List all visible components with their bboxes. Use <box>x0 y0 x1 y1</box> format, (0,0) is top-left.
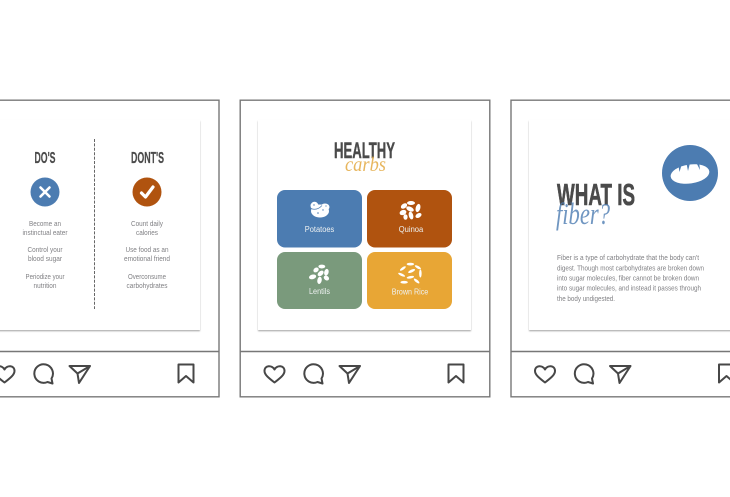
content card <box>0 120 200 330</box>
don'ts list <box>124 221 170 290</box>
post frame <box>0 100 219 397</box>
tile: quinoa: Quinoa <box>399 224 423 234</box>
icon: blue cross <box>30 178 60 206</box>
panel: do's and don'ts post <box>0 100 219 397</box>
heading: don'ts: DONT'S <box>131 150 164 167</box>
content card <box>529 120 730 330</box>
don'ts list: carbohydrates <box>126 283 168 290</box>
do's list: Control your <box>28 247 63 254</box>
action icons <box>264 364 464 384</box>
don'ts list: Count daily <box>131 221 163 228</box>
panel: what is fiber post <box>511 100 730 397</box>
post frame <box>511 100 730 397</box>
action icons <box>535 364 730 384</box>
heading: do's: DO'S <box>34 150 56 167</box>
do's list: blood sugar <box>28 256 63 263</box>
do's list <box>22 221 68 290</box>
tile: lentils: Lentils <box>309 286 330 296</box>
tile: brown rice: Brown Rice <box>392 286 428 296</box>
title: WHAT IS <box>557 178 635 212</box>
icon: brown rice <box>398 263 422 284</box>
icon: lentils <box>308 265 330 284</box>
icon: potatoes <box>310 202 330 218</box>
tile: potatoes: Potatoes <box>305 224 334 234</box>
icon: bread in circle <box>662 145 718 201</box>
body text: Fiber is a type of carbohydrate that the body can't <box>557 255 699 262</box>
tile: quinoa <box>367 190 452 248</box>
tile: potatoes <box>277 190 362 248</box>
don'ts list: Use food as an <box>126 247 169 254</box>
body text: into sugar molecules, fiber cannot be broken down <box>557 276 699 282</box>
don'ts list: emotional friend <box>124 256 170 263</box>
title: HEALTHY <box>334 138 395 163</box>
don'ts list: calories <box>136 230 158 237</box>
do's list: nutrition <box>34 283 57 290</box>
body text: the body undigested. <box>557 296 615 303</box>
script subtitle: fiber? <box>556 196 610 231</box>
divider <box>94 139 96 309</box>
post frame <box>240 100 490 397</box>
do's list: Become an <box>29 221 61 228</box>
action icons <box>0 364 194 384</box>
tile: lentils <box>277 252 362 309</box>
panel: healthy carbs post <box>240 100 490 397</box>
do's list: Periodize your <box>26 274 65 281</box>
body text: digest. Though most carbohydrates are broken down <box>557 266 704 272</box>
body text: into sugar molecules, and instead it passes through <box>557 286 701 292</box>
body text <box>557 255 704 303</box>
don'ts list: Overconsume <box>128 274 166 281</box>
tile: brown rice <box>367 252 452 309</box>
content card <box>258 120 471 330</box>
script subtitle: carbs <box>345 154 386 176</box>
icon: quinoa <box>399 201 422 220</box>
do's list: instinctual eater <box>22 230 68 237</box>
icon: rust check <box>132 178 162 206</box>
